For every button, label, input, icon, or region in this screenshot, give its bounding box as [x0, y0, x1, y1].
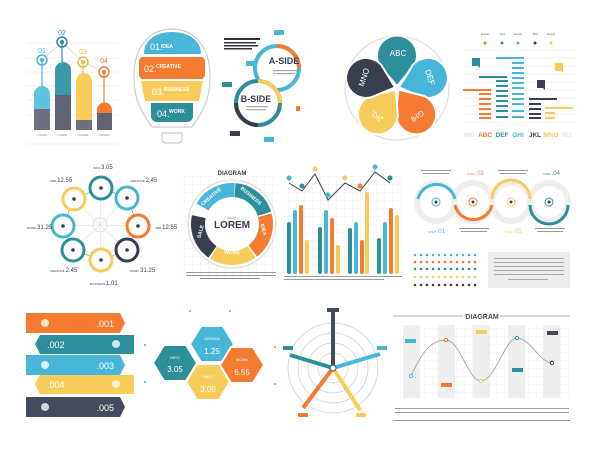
band 01 idea: IDEA: [161, 44, 173, 50]
panel: ribbons: [26, 313, 134, 417]
petal GHI: GHI: [409, 108, 426, 124]
hex SALE: [186, 364, 230, 400]
ribbon 004: .004: [47, 380, 65, 390]
panel: wave diagram: [393, 314, 570, 421]
panel: gantt chart: Text: [532, 32, 538, 36]
panel: circular diagram: DIAGRAM: [218, 171, 246, 177]
text box: [488, 252, 570, 288]
panel: gantt chart: Lorem: [481, 32, 490, 36]
panel: gantt chart: ABC: [478, 132, 492, 139]
petal DEF: DEF: [423, 68, 437, 86]
bar 02: 02: [58, 30, 66, 37]
panel: circle network: ADD 12.55: [50, 178, 73, 184]
panel: circle network: [27, 165, 178, 287]
hex INFO: 3.05: [167, 365, 183, 374]
panel: radar chart: [283, 308, 387, 417]
panel: circular diagram: IDEA: [259, 223, 268, 237]
panel: circular diagram: LOREM: [214, 220, 250, 231]
panel: light bulb: [134, 29, 210, 143]
panel: circular diagram: SALE: [196, 224, 206, 239]
panel: bar chart with pins: LOREM: [78, 133, 89, 137]
hex DESIGN: [190, 326, 234, 362]
panel: bar chart with pins: LOREM: [57, 133, 68, 137]
hex INFO: INFO: [170, 355, 180, 360]
band 01 idea: [144, 32, 201, 54]
petal ABC: ABC: [390, 49, 406, 58]
panel: circle network: CREATIVE 2.45: [50, 268, 78, 274]
band 01 idea: 01.: [150, 42, 163, 52]
petal MNO: MNO: [357, 67, 371, 88]
panel: gantt chart: Lorem: [514, 32, 523, 36]
A-side ring: A-SIDE: [269, 56, 299, 66]
hex DESIGN: 1.25: [204, 347, 220, 356]
panel: gantt chart: 001: [562, 132, 573, 139]
panel: gantt chart: [463, 32, 573, 139]
hex DESIGN: DESIGN: [204, 336, 220, 341]
panel: flower petals: [341, 35, 453, 142]
band 03 business: BUSINESS: [164, 87, 190, 93]
band 04 work: WORK: [169, 109, 185, 115]
panel: circular diagram: WORK: [224, 250, 240, 256]
band 04 work: [151, 103, 193, 122]
panel: gantt chart: Text: [499, 32, 505, 36]
panel: bar chart with pins: LOREM: [37, 133, 48, 137]
panel: circular diagram: TWOKO: [226, 216, 238, 220]
panel: gantt chart: MNO: [543, 132, 559, 139]
panel: bar chart with pins: [27, 30, 118, 144]
hex WORK: [220, 347, 264, 383]
panel: step process: STEP .04: [543, 171, 561, 177]
bar 01: 01: [38, 48, 46, 55]
panel: circle network: CREATIVE 2.45: [130, 178, 158, 184]
hex SALE: 3.00: [200, 385, 216, 394]
panel: gantt chart: GHI: [512, 132, 524, 139]
ribbon 005: .005: [96, 403, 114, 413]
band 03 business: 03.: [152, 87, 165, 97]
panel: circle network: WORK 31.25: [27, 225, 53, 231]
ribbon 001: .001: [96, 319, 114, 329]
band 02 creative: CREATIVE: [156, 64, 182, 70]
panel: wave diagram: DIAGRAM: [465, 314, 499, 321]
panel: circle network: WORK 31.25: [130, 268, 156, 274]
panel: gantt chart: DEF: [496, 132, 509, 139]
panel: step process: STEP .01: [428, 229, 446, 235]
panel: bar chart with pins: LOREM: [99, 133, 110, 137]
dot matrix: [414, 254, 476, 286]
panel: step process: STEP .03: [505, 229, 523, 235]
band 03 business: [141, 81, 203, 101]
band 02 creative: 02.: [144, 64, 157, 74]
panel: circle network: BUSINESS 1.01: [90, 281, 118, 287]
hex WORK: 6.55: [234, 368, 250, 377]
hex SALE: SALE: [203, 374, 213, 379]
bar 04: 04: [100, 58, 108, 65]
panel: bar and line chart: [284, 164, 404, 280]
B-side ring: B-SIDE: [241, 94, 271, 104]
flag tags: [472, 58, 563, 90]
panel: circular diagram: BUSINESS: [239, 186, 263, 207]
panel: circular diagram: CREATIVE: [200, 187, 223, 208]
band 04 work: 04.: [157, 109, 170, 119]
bar 03: 03: [79, 49, 87, 56]
panel: gantt chart: 000: [464, 132, 475, 139]
panel: gantt chart: Lorem: [547, 32, 556, 36]
panel: hexagons: [144, 310, 276, 400]
panel: circle network: INFO 3.05: [93, 165, 113, 171]
panel: circle network: ADD 12.55: [155, 225, 178, 231]
panel: step process: [417, 170, 568, 235]
petal JKL: JKL: [368, 108, 385, 124]
hex INFO: [153, 345, 197, 381]
panel: A-side B-side: [222, 30, 300, 142]
band 02 creative: [139, 57, 205, 79]
ribbon 003: .003: [96, 361, 114, 371]
panel: step process: STEP .02: [467, 171, 485, 177]
panel: circular diagram: [180, 171, 279, 280]
hex WORK: WORK: [236, 357, 249, 362]
ribbon 002: .002: [47, 340, 65, 350]
panel: gantt chart: JKL: [529, 132, 541, 139]
